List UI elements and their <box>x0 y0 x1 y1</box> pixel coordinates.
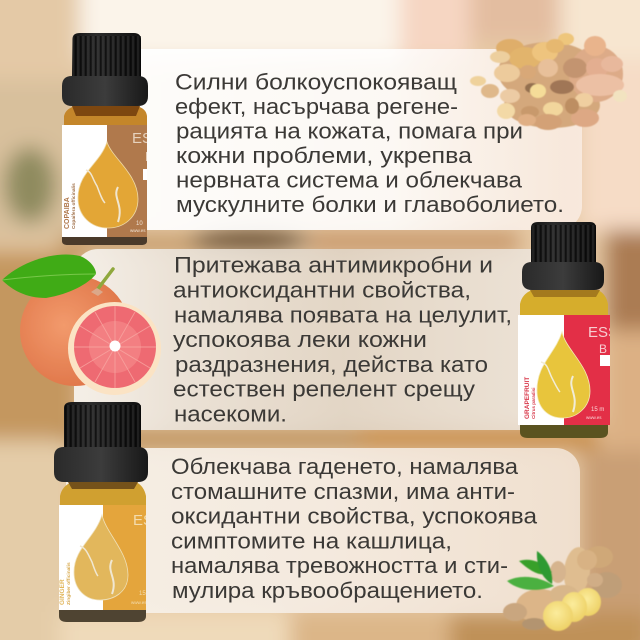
text block: grapefruit description: успокоява леки кожни <box>173 327 427 352</box>
text block: copaiba description: нервната система и облекчава <box>176 167 523 192</box>
icon: copaiba bottle: COPAIBA <box>64 197 71 229</box>
text block: grapefruit description: раздразнения, действа като <box>175 352 488 377</box>
icon: grapefruit bottle: B <box>599 342 607 356</box>
text block: grapefruit description <box>173 253 512 426</box>
text block: ginger description: симптомите на кашлица, <box>171 528 452 553</box>
icon: ginger bottle: www.es <box>131 600 147 605</box>
text block: ginger description: Облекчава гаденето, намалява <box>171 454 519 479</box>
icon: copaiba bottle: Copaifera officinalis <box>71 183 77 229</box>
icon: grapefruit bottle: Citrus paradisi <box>531 387 536 419</box>
icon: ginger bottle: GINGER <box>59 579 66 605</box>
text block: copaiba description: кожни проблеми, укрепва <box>176 143 473 168</box>
icon: ginger bottle: Zingiber officinalis <box>66 562 72 605</box>
icon: grapefruit bottle: GRAPEFRUIT <box>524 377 531 419</box>
icon: ginger bottle <box>54 402 153 622</box>
icon: ginger bottle: ES <box>133 512 153 529</box>
panel: grapefruit background card <box>74 249 564 430</box>
text block: ginger description: оксидантни свойства, успокоява <box>171 504 538 529</box>
icon: grapefruit bottle: ESS <box>588 324 618 341</box>
text block: ginger description: намалява тревожността и сти- <box>171 553 508 578</box>
text block: copaiba description: мускулните болки и главоболието. <box>176 192 564 217</box>
text block: copaiba description <box>175 69 564 217</box>
leaves <box>519 560 552 575</box>
panel: ginger background card <box>66 448 580 613</box>
text block: grapefruit description: антиоксидантни свойства, <box>173 278 471 302</box>
text block: grapefruit description: Притежава антимикробни и <box>174 253 493 278</box>
text block: grapefruit description: естествен репелент срещу <box>173 377 476 402</box>
icon: copaiba bottle <box>62 33 148 245</box>
text block: copaiba description: рацията на кожата, помага при <box>176 118 523 143</box>
icon: copaiba bottle: ESS <box>132 130 162 147</box>
icon: copaiba bottle: www.es <box>130 228 146 233</box>
text block: grapefruit description: намалява появата на целулит, <box>174 302 512 327</box>
text block: copaiba description: Силни болкоуспокояващ <box>175 69 457 94</box>
icon: grapefruit bottle <box>518 222 618 438</box>
panel: copaiba background card <box>100 49 582 230</box>
leaf <box>2 254 96 298</box>
text block: copaiba description: ефект, насърчава регене- <box>175 94 458 119</box>
text block: grapefruit description: насекоми. <box>174 402 287 426</box>
icon: copaiba resin <box>470 33 627 130</box>
icon: copaiba bottle: B <box>145 149 154 164</box>
text block: ginger description: стомашните спазми, има анти- <box>171 479 515 504</box>
icon: ginger root <box>503 546 622 631</box>
text block: ginger description <box>171 454 538 603</box>
icon: copaiba bottle: 10 <box>136 221 143 227</box>
icon: grapefruit bottle: www.es <box>586 415 602 420</box>
text block: ginger description: мулира кръвообращението. <box>172 578 483 603</box>
icon: grapefruit <box>2 254 161 395</box>
icon: grapefruit bottle: 15 m <box>591 407 604 413</box>
icon: ginger bottle: 15 <box>139 591 146 597</box>
